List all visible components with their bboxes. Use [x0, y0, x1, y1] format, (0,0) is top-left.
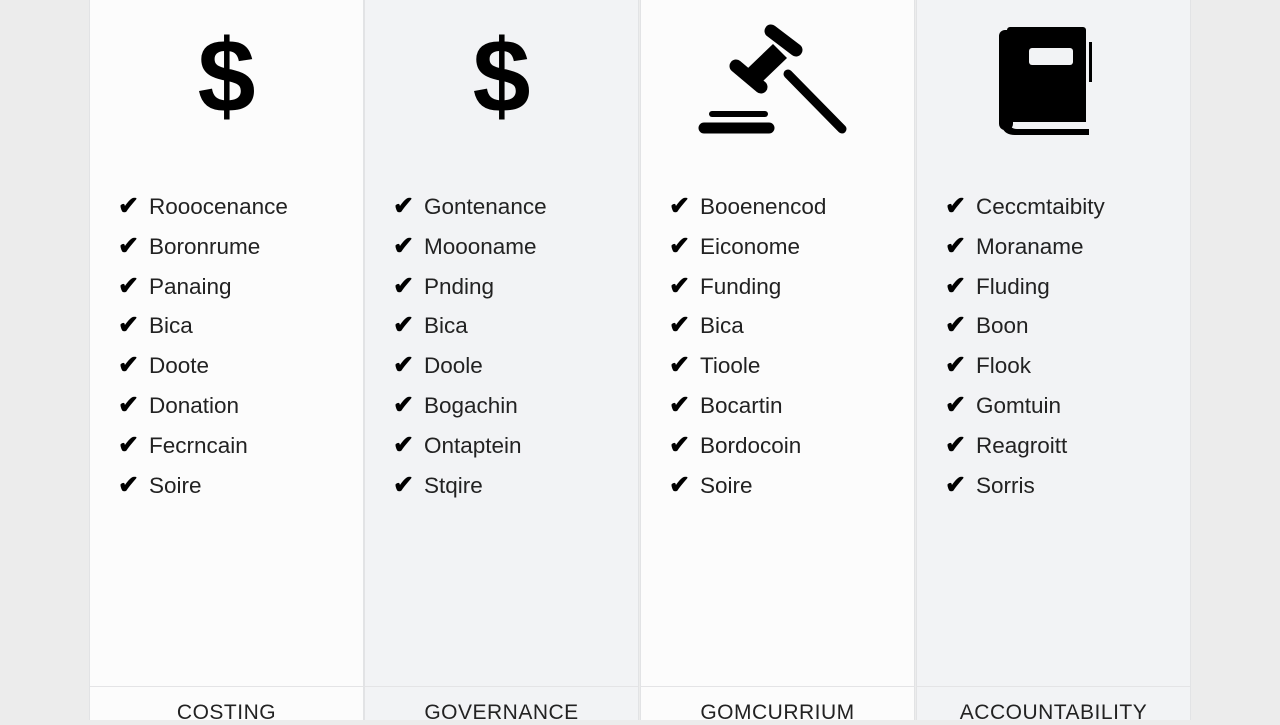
checklist: Eiconome	[700, 234, 800, 259]
icon: book	[999, 27, 1092, 135]
checklist	[393, 192, 547, 499]
checklist: ✔	[118, 431, 139, 459]
checklist: Boon	[976, 313, 1029, 338]
panel: governance	[364, 0, 639, 720]
checklist: ✔	[393, 192, 414, 220]
checklist: ✔	[945, 232, 966, 260]
icon: dollar: $	[473, 19, 530, 135]
checklist: Flook	[976, 353, 1031, 378]
checklist: Bica	[149, 313, 193, 338]
icon: gavel	[698, 24, 846, 134]
checklist: ✔	[393, 471, 414, 499]
checklist	[118, 192, 288, 499]
checklist: ✔	[393, 272, 414, 300]
checklist: Bica	[424, 313, 468, 338]
checklist: ✔	[669, 351, 690, 379]
checklist: ✔	[118, 232, 139, 260]
panel: accountability	[916, 0, 1191, 720]
checklist: ✔	[945, 351, 966, 379]
panel: compliance	[640, 0, 915, 720]
checklist: ✔	[669, 391, 690, 419]
checklist: ✔	[669, 311, 690, 339]
checklist: Gontenance	[424, 194, 547, 219]
checklist: Pnding	[424, 274, 494, 299]
checklist: Gomtuin	[976, 393, 1061, 418]
checklist: ✔	[945, 471, 966, 499]
checklist: Ontaptein	[424, 433, 522, 458]
checklist: Soire	[700, 473, 753, 498]
checklist: Stqire	[424, 473, 483, 498]
checklist: ✔	[669, 192, 690, 220]
checklist: Moraname	[976, 234, 1084, 259]
checklist: ✔	[945, 311, 966, 339]
checklist: Panaing	[149, 274, 232, 299]
checklist: Reagroitt	[976, 433, 1067, 458]
checklist: Funding	[700, 274, 781, 299]
checklist: Boronrume	[149, 234, 260, 259]
checklist: Ceccmtaibity	[976, 194, 1105, 219]
checklist: Sorris	[976, 473, 1035, 498]
checklist: ✔	[669, 471, 690, 499]
checklist: Tioole	[700, 353, 760, 378]
checklist: ✔	[393, 391, 414, 419]
checklist: Bica	[700, 313, 744, 338]
checklist: ✔	[118, 351, 139, 379]
checklist: Fluding	[976, 274, 1050, 299]
checklist: ✔	[118, 391, 139, 419]
label: GOVERNANCE	[424, 701, 579, 724]
checklist	[945, 192, 1105, 499]
checklist: Bocartin	[700, 393, 783, 418]
checklist: ✔	[669, 431, 690, 459]
checklist: ✔	[669, 272, 690, 300]
checklist: Soire	[149, 473, 202, 498]
checklist: ✔	[118, 272, 139, 300]
checklist: Booenencod	[700, 194, 826, 219]
panel: costing	[89, 0, 364, 720]
checklist: Bogachin	[424, 393, 518, 418]
checklist: ✔	[945, 192, 966, 220]
checklist: ✔	[118, 192, 139, 220]
label: ACCOUNTABILITY	[960, 701, 1147, 724]
checklist: Bordocoin	[700, 433, 801, 458]
checklist	[669, 192, 826, 499]
checklist: ✔	[945, 391, 966, 419]
checklist: ✔	[945, 431, 966, 459]
checklist: ✔	[945, 272, 966, 300]
checklist: ✔	[393, 311, 414, 339]
checklist: ✔	[393, 232, 414, 260]
checklist: ✔	[393, 351, 414, 379]
checklist: Doote	[149, 353, 209, 378]
checklist: ✔	[118, 471, 139, 499]
checklist: Moooname	[424, 234, 537, 259]
label: COSTING	[177, 701, 276, 724]
checklist: ✔	[118, 311, 139, 339]
checklist: ✔	[393, 431, 414, 459]
label: GOMCURRIUM	[700, 701, 855, 724]
checklist: Rooocenance	[149, 194, 288, 219]
checklist: ✔	[669, 232, 690, 260]
checklist: Fecrncain	[149, 433, 248, 458]
checklist: Doole	[424, 353, 483, 378]
checklist: Donation	[149, 393, 239, 418]
icon: dollar: $	[198, 19, 255, 135]
